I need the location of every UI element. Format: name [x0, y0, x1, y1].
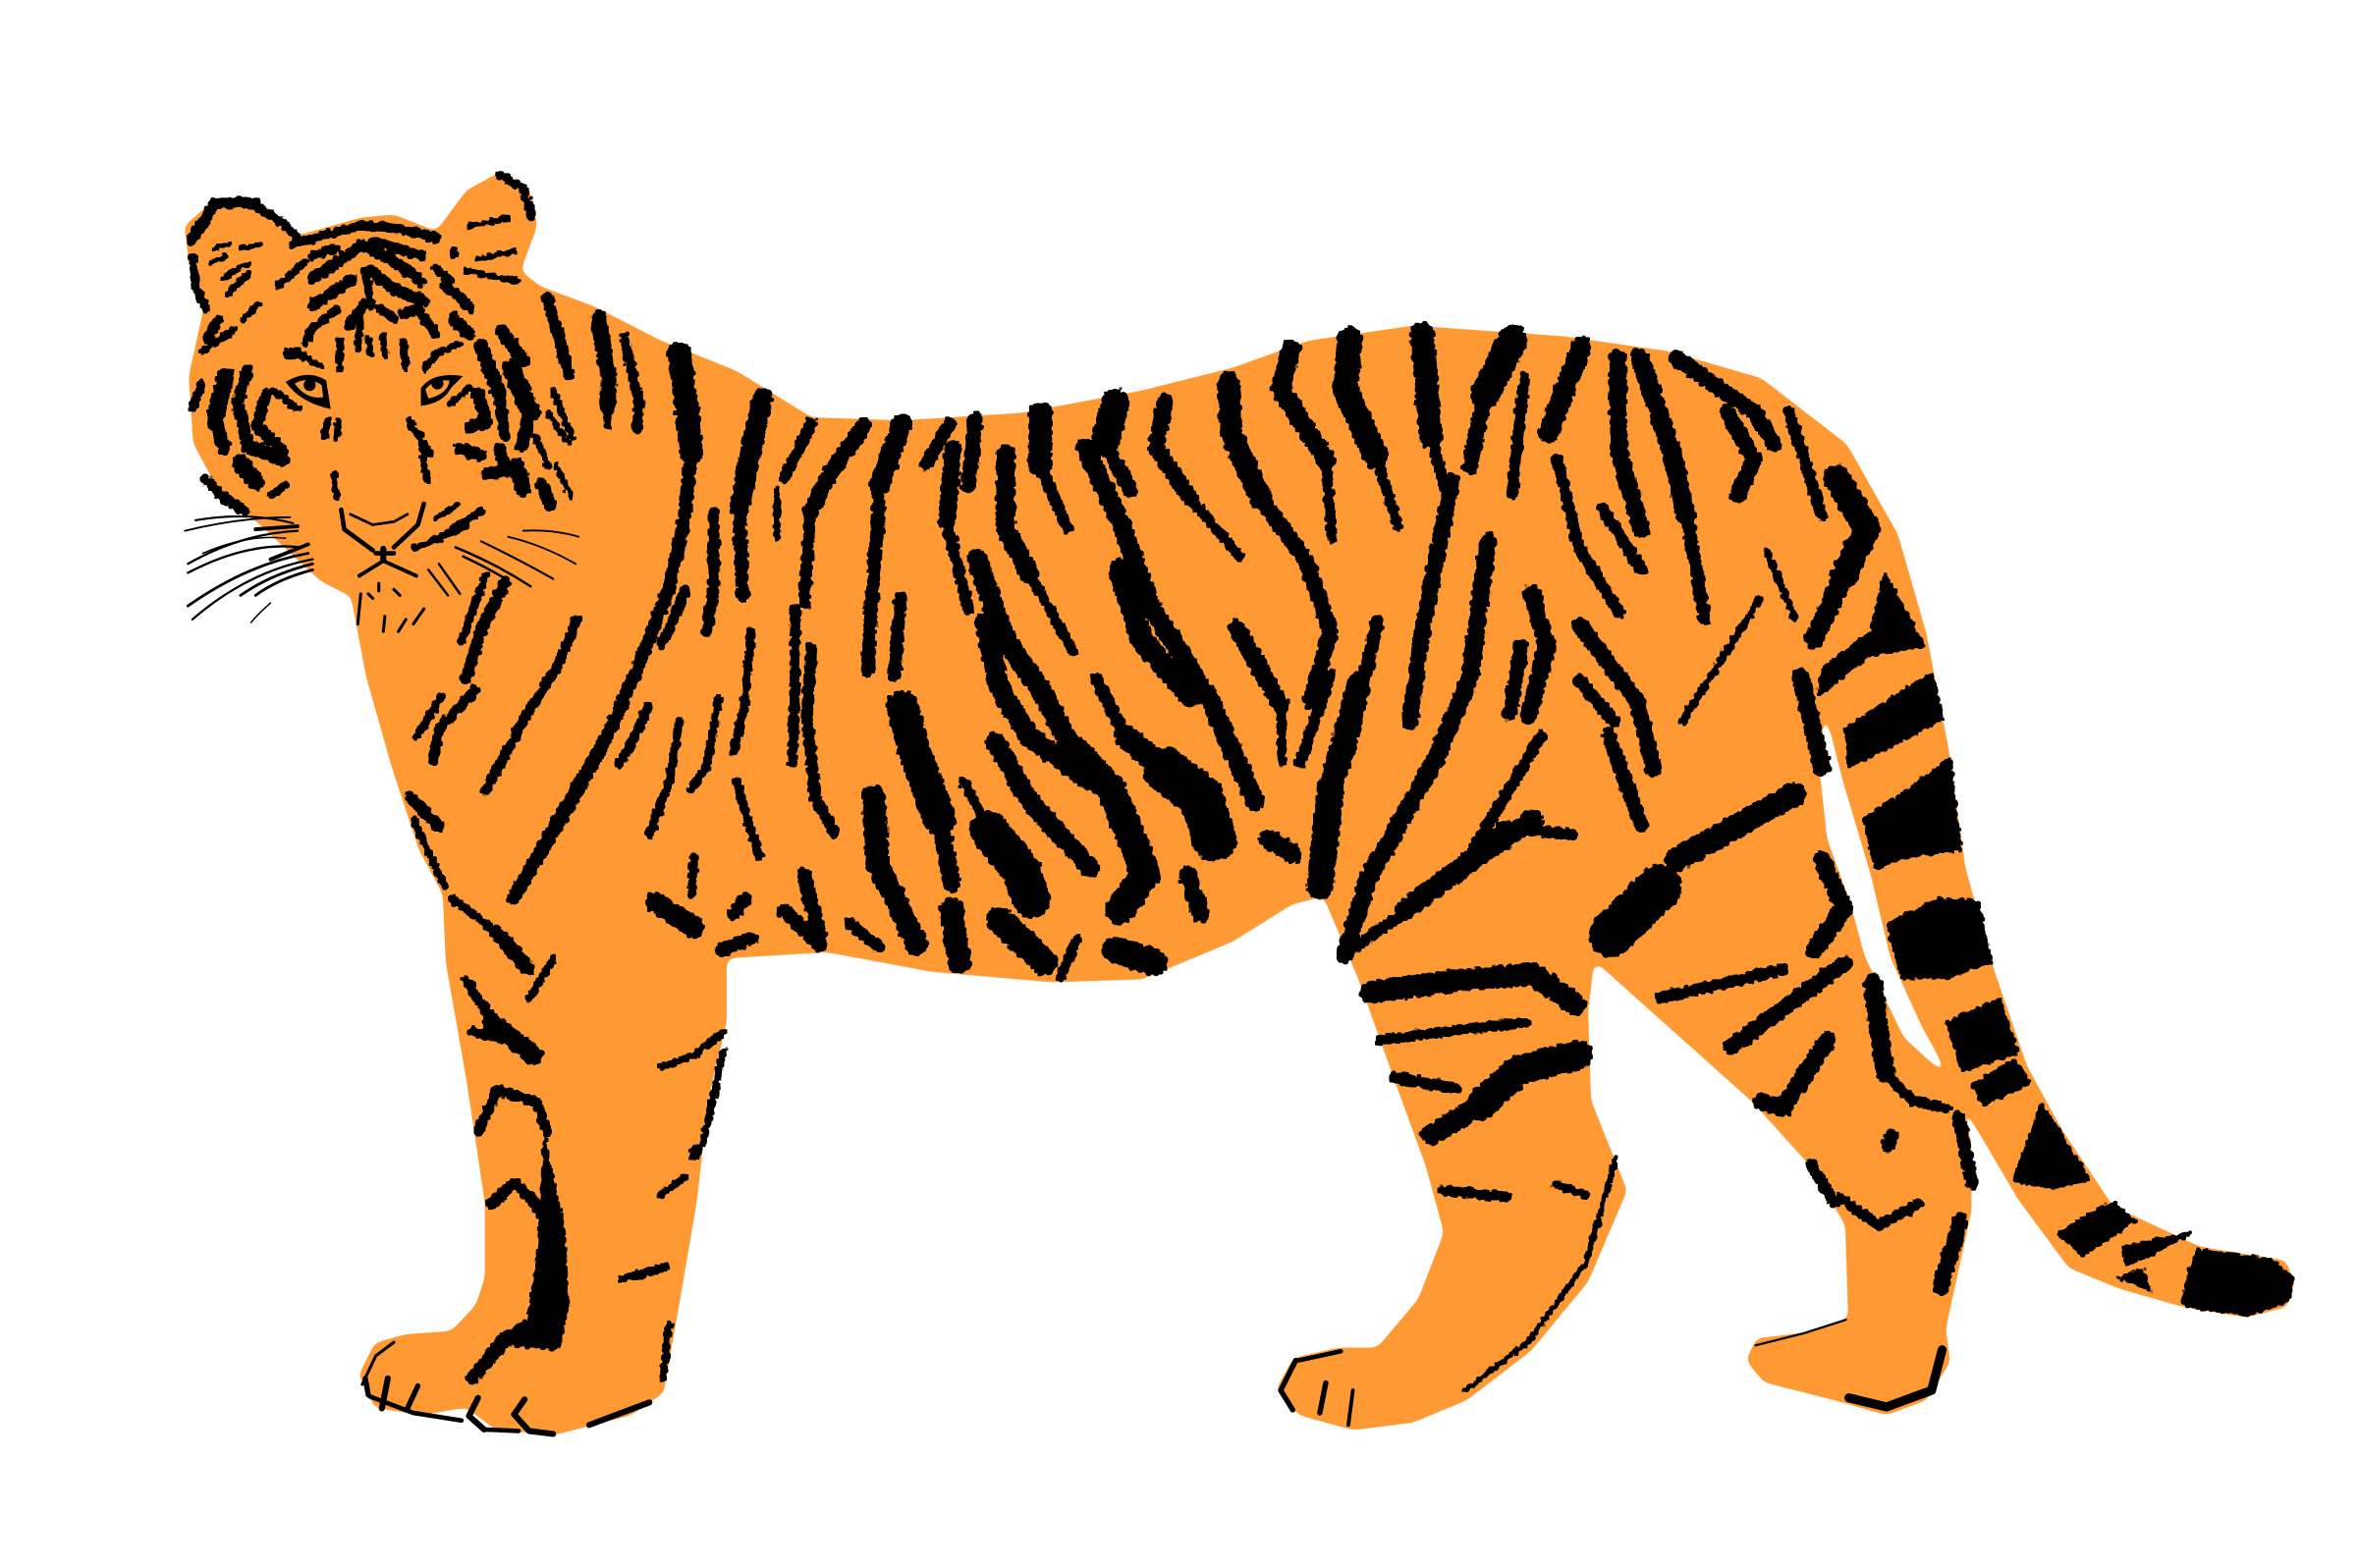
eyes [286, 375, 463, 409]
nose and mouth [341, 504, 424, 631]
whiskers [185, 516, 578, 622]
flank stripes, middle [1062, 334, 1521, 977]
paws and claws [362, 1320, 1943, 1433]
neck and shoulder stripes [411, 297, 762, 897]
rump and hindquarter stripes [1349, 340, 1972, 1286]
tiger body silhouette [184, 172, 2295, 1435]
hind leg stripes [1371, 974, 1616, 1390]
head markings [191, 175, 572, 549]
front leg stripes [453, 899, 725, 1379]
flank stripes, front [649, 413, 1145, 962]
tail stripes [1819, 574, 2292, 1316]
front leg dark inner shadow [466, 1138, 569, 1386]
